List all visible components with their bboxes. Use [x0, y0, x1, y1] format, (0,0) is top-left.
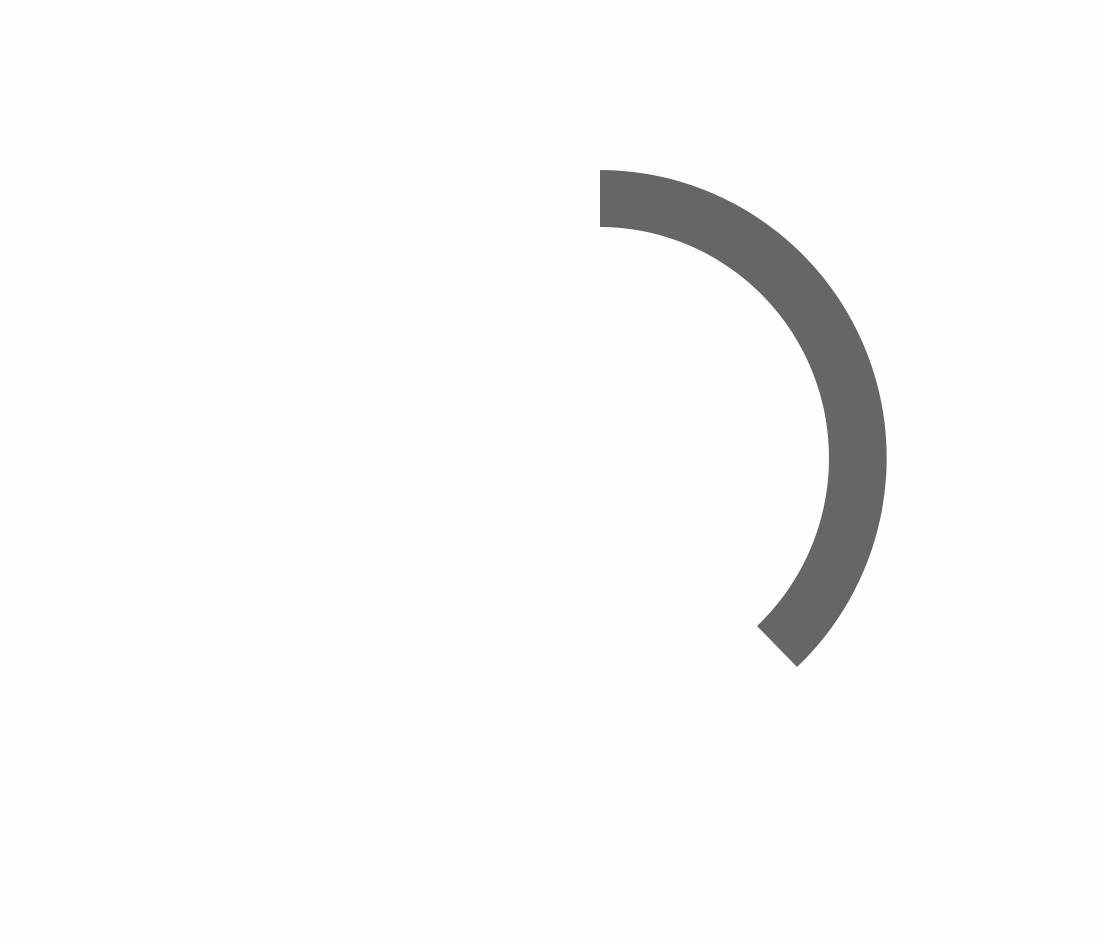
arc segment: [600, 170, 887, 667]
